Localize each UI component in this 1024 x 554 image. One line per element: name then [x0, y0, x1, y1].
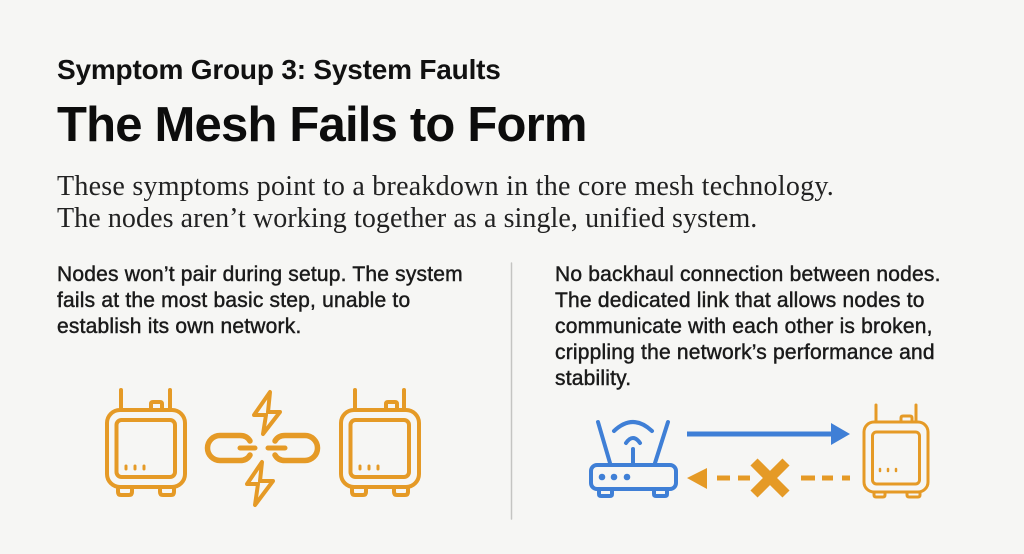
subtitle: Symptom Group 3: System Faults: [57, 54, 501, 85]
right symptom text: [555, 263, 941, 390]
left symptom text: Nodes won’t pair during setup. The system: [57, 263, 463, 286]
right symptom text: stability.: [555, 367, 631, 390]
right symptom text: crippling the network’s performance and: [555, 341, 935, 364]
arrow: working link to node: [687, 423, 850, 445]
icon: router: [591, 422, 676, 496]
left symptom text: establish its own network.: [57, 315, 301, 338]
intro text: These symptoms point to a breakdown in the core mesh technology.: [57, 171, 834, 202]
left symptom text: [57, 263, 463, 338]
intro text: The nodes aren’t working together as a single, unified system.: [57, 203, 757, 234]
title: The Mesh Fails to Form: [57, 98, 587, 152]
icon: right mesh node: [341, 390, 419, 495]
right symptom text: The dedicated link that allows nodes to: [555, 289, 925, 312]
column divider: [510, 263, 512, 519]
icon: broken chain link with lightning: [208, 392, 318, 505]
right symptom text: communicate with each other is broken,: [555, 315, 933, 338]
icon: left mesh node: [107, 390, 185, 495]
icon: small mesh node: [864, 405, 928, 497]
left symptom text: fails at the most basic step, unable to: [57, 289, 410, 312]
arrow: broken dashed return link: [687, 462, 850, 494]
intro text: [57, 171, 834, 234]
right symptom text: No backhaul connection between nodes.: [555, 263, 941, 286]
